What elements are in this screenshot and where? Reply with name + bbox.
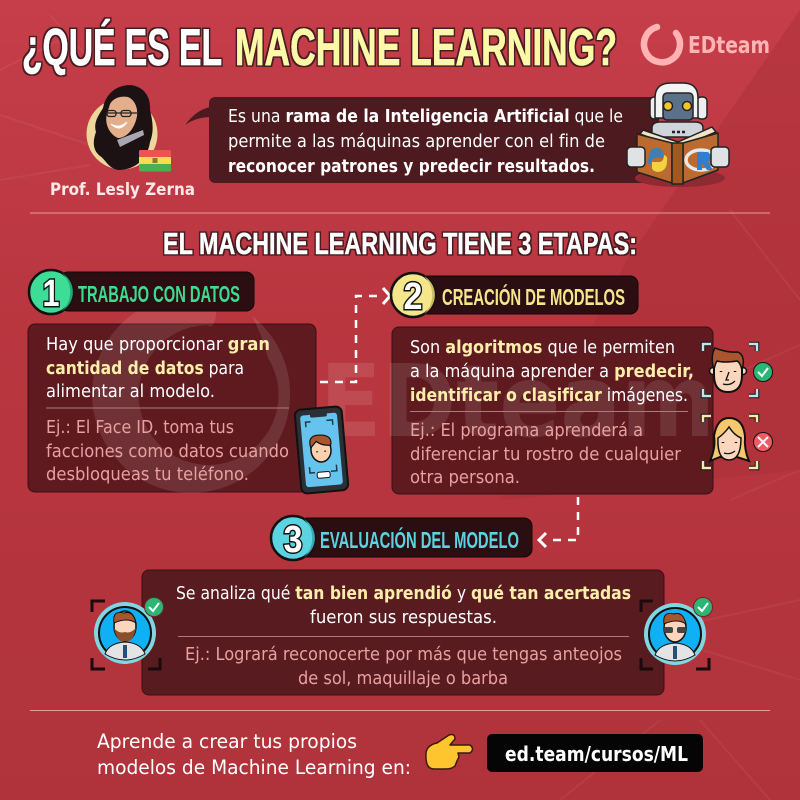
step 2 text: Son algoritmos que le permiten — [410, 337, 675, 358]
speech bubble: permite a las máquinas aprender con el fin de — [228, 131, 605, 152]
step 1 text — [46, 334, 289, 485]
step 1 text: Hay que proporcionar gran — [46, 334, 270, 355]
icon: robot reading book — [627, 83, 729, 187]
step 2 heading: 2 — [404, 276, 422, 318]
watermark: EDteam logo: EDteam — [320, 343, 715, 460]
step 2 heading — [391, 273, 638, 318]
step 1 heading: 1 — [42, 273, 60, 315]
step 1 text: facciones como datos cuando — [46, 441, 289, 462]
step 2 heading: CREACIÓN DE MODELOS — [442, 283, 625, 310]
panel: step 1 box — [28, 324, 316, 492]
section heading: EL MACHINE LEARNING TIENE 3 ETAPAS: — [163, 226, 637, 261]
connector arrow 1 to 2 — [320, 288, 390, 382]
logo: EDteam: EDteam — [688, 33, 770, 59]
title — [22, 19, 617, 77]
step 2 text — [410, 337, 694, 488]
title: MACHINE LEARNING? — [235, 19, 617, 77]
step 1 text: alimentar al modelo. — [46, 381, 215, 402]
connector arrow 2 to 3 — [539, 497, 578, 547]
step 2 text: otra persona. — [410, 467, 520, 488]
watermark: EDteam logo — [92, 295, 715, 493]
step 3 text: Se analiza qué tan bien aprendió y qué tan acertadas — [176, 583, 631, 604]
step 2 text: diferenciar tu rostro de cualquier — [410, 444, 682, 465]
step 3 heading — [271, 516, 532, 561]
link button: ed.team/cursos/ML — [505, 742, 688, 766]
step 3 text: Ej.: Logrará reconocerte por más que tengas anteojos — [185, 644, 622, 665]
step 2 text: Ej.: El programa aprenderá a — [410, 420, 643, 441]
step 3 text — [176, 583, 631, 689]
step 1 heading: TRABAJO CON DATOS — [78, 281, 240, 307]
step 3 text: de sol, maquillaje o barba — [298, 668, 508, 689]
step 2 text: identificar o clasificar imágenes. — [410, 385, 688, 406]
title: ¿QUÉ ES EL — [22, 19, 222, 77]
panel: step 3 box — [142, 570, 664, 695]
icon: bearded man verified — [92, 598, 164, 669]
step 2 text: a la máquina aprender a predecir, — [410, 361, 694, 382]
step 3 heading: 3 — [284, 519, 302, 561]
icon: recognised male face — [703, 344, 772, 396]
icon: pointing hand — [426, 734, 472, 769]
icon: rejected female face — [703, 416, 772, 468]
step 3 text: fueron sus respuestas. — [310, 607, 497, 628]
footer call to action — [97, 730, 411, 779]
step 1 heading — [29, 270, 254, 315]
link button — [487, 734, 703, 772]
panel: step 2 box — [392, 327, 713, 494]
step 1 text: cantidad de datos para — [46, 358, 244, 379]
speech bubble — [185, 97, 659, 183]
icon: Bolivia flag — [139, 150, 171, 172]
presenter name: Prof. Lesly Zerna — [50, 180, 195, 200]
speech bubble: Es una rama de la Inteligencia Artificial que le — [228, 106, 623, 127]
logo: EDteam — [644, 27, 770, 62]
speech bubble: reconocer patrones y predecir resultados. — [228, 156, 595, 177]
step 1 text: desbloqueas tu teléfono. — [46, 464, 249, 485]
portrait: Prof. Lesly Zerna — [86, 85, 158, 170]
step 1 text: Ej.: El Face ID, toma tus — [46, 417, 234, 438]
icon: man with sunglasses verified — [641, 598, 712, 669]
icon: phone with Face ID — [294, 406, 349, 494]
step 3 heading: EVALUACIÓN DEL MODELO — [320, 526, 519, 553]
footer call to action: modelos de Machine Learning en: — [97, 756, 411, 779]
footer call to action: Aprende a crear tus propios — [97, 730, 357, 753]
